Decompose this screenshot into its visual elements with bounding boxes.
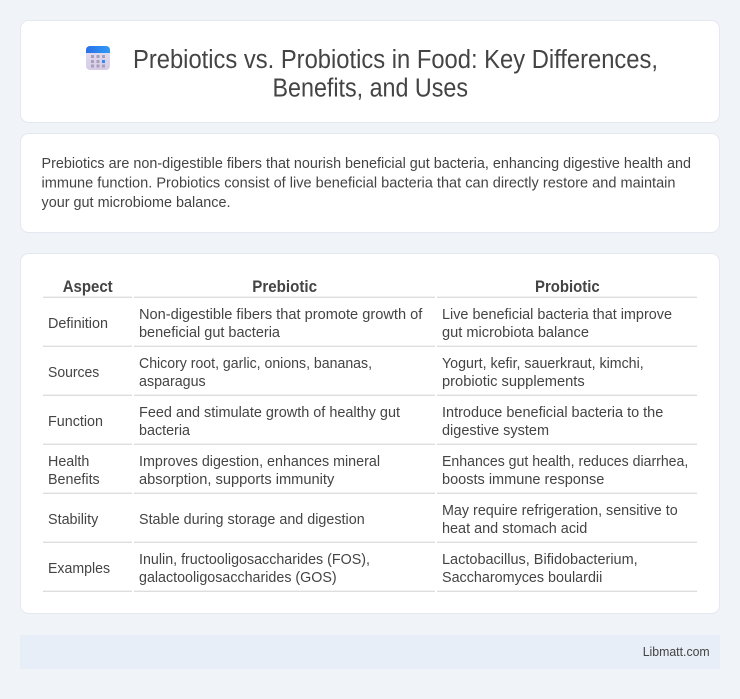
title: Benefits, and Uses (272, 74, 468, 102)
panel: introduction (20, 134, 720, 232)
footer: Libmatt.com (643, 645, 710, 659)
row: definition (48, 306, 672, 341)
row: function: Feed and stimulate growth of healthy gut (139, 404, 401, 421)
row: sources: Yogurt, kefir, sauerkraut, kimchi, (442, 355, 644, 372)
row: function: bacteria (139, 422, 191, 439)
footer (20, 635, 720, 669)
intro text (42, 155, 691, 211)
table header row: Aspect (63, 278, 113, 296)
row: function: Function (48, 413, 103, 430)
table header row (63, 278, 600, 296)
row: health benefits: absorption, supports immunity (139, 471, 335, 488)
row: health benefits: Benefits (48, 471, 100, 488)
row: health benefits: boosts immune response (442, 471, 604, 488)
row: health benefits (48, 453, 688, 488)
row: stability: Stability (48, 511, 99, 528)
row: definition: beneficial gut bacteria (139, 324, 281, 341)
row: function: digestive system (442, 422, 549, 439)
row: definition: Non-digestible fibers that promote growth of (139, 306, 423, 323)
row: examples: galactooligosaccharides (GOS) (139, 569, 337, 586)
panel: comparison table (20, 254, 720, 614)
row: examples: Inulin, fructooligosaccharides (FOS), (139, 551, 370, 568)
row: health benefits: Enhances gut health, reduces diarrhea, (442, 453, 688, 470)
title: Prebiotics vs. Probiotics in Food: Key Differences, (133, 46, 658, 74)
title (133, 46, 658, 102)
row: health benefits: Improves digestion, enhances mineral (139, 453, 380, 470)
icon: calendar (86, 46, 110, 70)
row: examples: Examples (48, 560, 110, 577)
row: definition: Definition (48, 315, 108, 332)
row: definition: Live beneficial bacteria that improve (442, 306, 672, 323)
row: sources: Chicory root, garlic, onions, bananas, (139, 355, 372, 372)
row: health benefits: Health (48, 453, 89, 470)
row: function (48, 404, 663, 439)
table header row: Probiotic (535, 278, 600, 296)
intro text: immune function. Probiotics consist of live beneficial bacteria that can directly restore and maintain (42, 174, 676, 192)
row: definition: gut microbiota balance (442, 324, 589, 341)
row: stability (48, 502, 678, 537)
row: sources: asparagus (139, 373, 206, 390)
row: function: Introduce beneficial bacteria to the (442, 404, 663, 421)
table header row: Prebiotic (252, 278, 317, 296)
row: sources (48, 355, 644, 390)
row: examples (48, 551, 638, 586)
row: examples: Lactobacillus, Bifidobacterium, (442, 551, 638, 568)
intro text: your gut microbiome balance. (42, 194, 230, 211)
row: sources: probiotic supplements (442, 373, 585, 390)
intro text: Prebiotics are non-digestible fibers that nourish beneficial gut bacteria, enhancing digestive health and (42, 155, 691, 172)
row: sources: Sources (48, 364, 99, 381)
row: examples: Saccharomyces boulardii (442, 569, 602, 586)
row: stability: heat and stomach acid (442, 520, 587, 537)
panel: title header (20, 20, 720, 122)
row: stability: Stable during storage and digestion (139, 511, 365, 528)
row: stability: May require refrigeration, sensitive to (442, 502, 678, 519)
